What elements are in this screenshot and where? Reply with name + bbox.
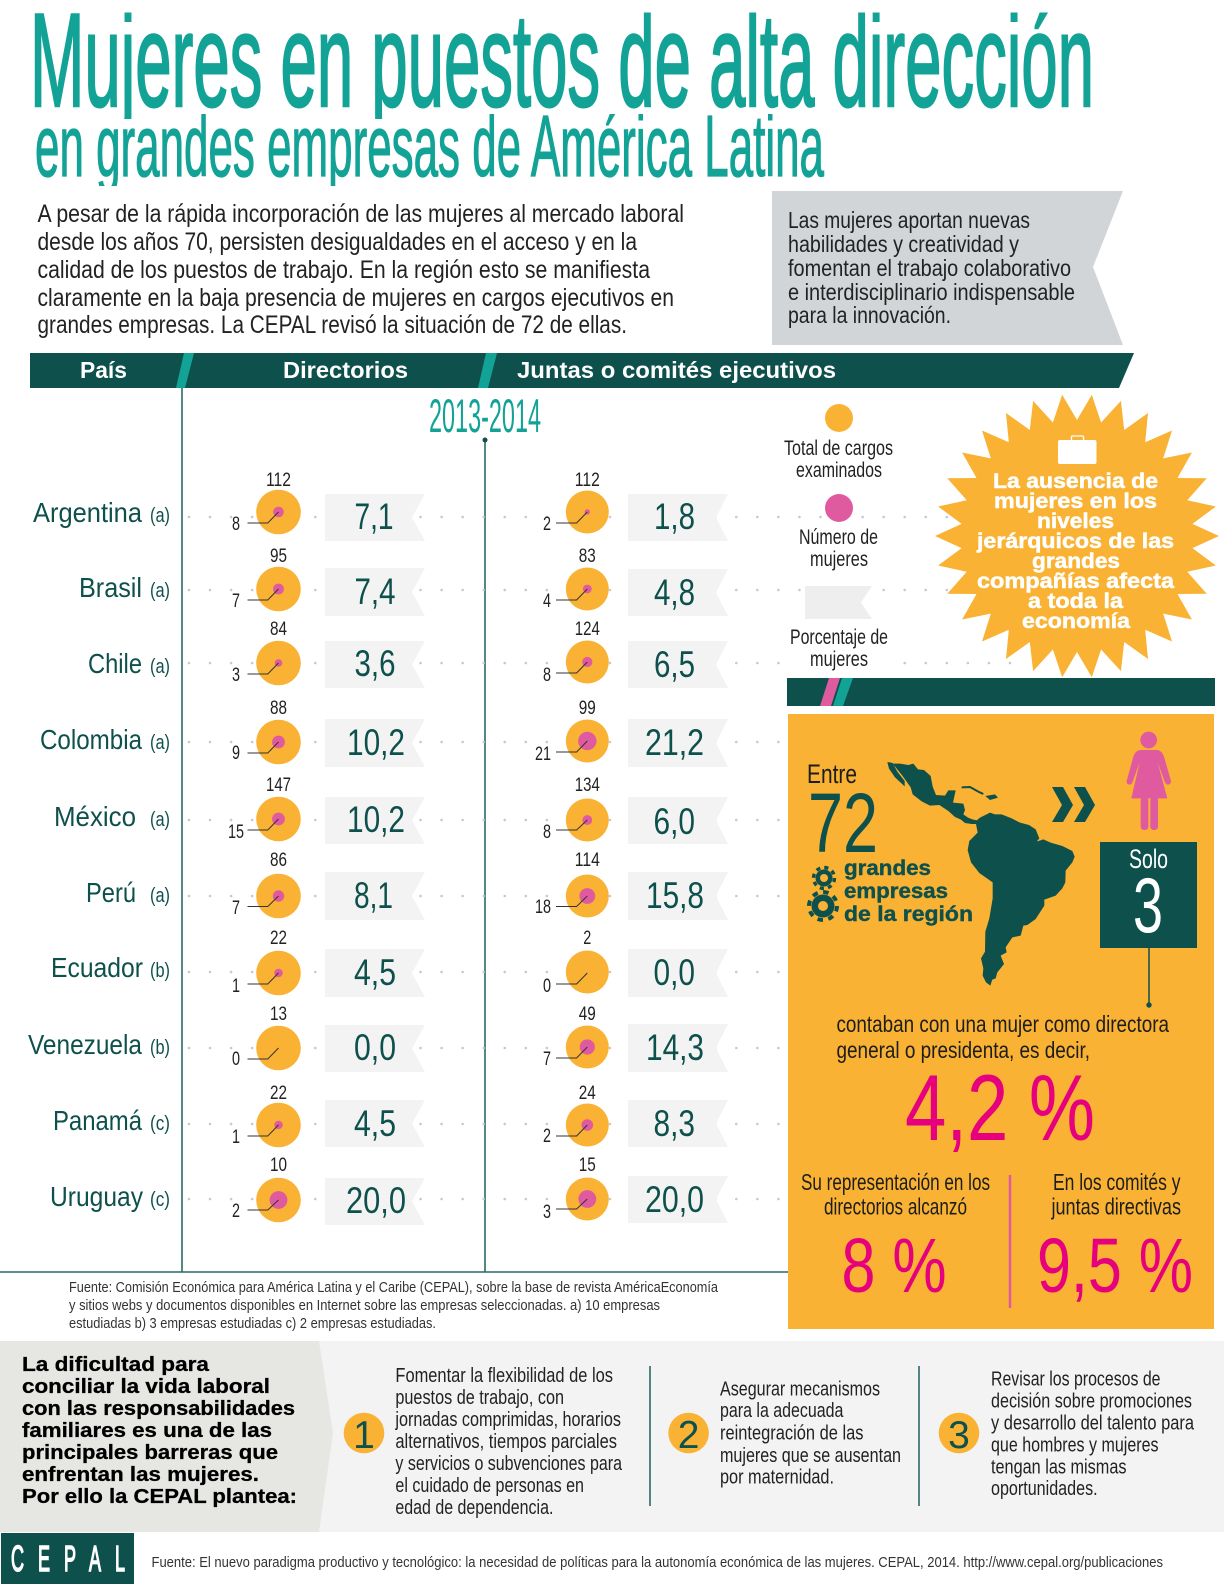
callout: innovation ribbon: fomentan el trabajo colaborativo [788,255,1071,281]
icon: double chevron arrow [1052,787,1095,822]
row: Panamá: 2 [543,1126,551,1147]
stat block: directorios 8 %: Su representación en los [801,1169,990,1195]
row: México: México [54,801,136,832]
starburst callout: compañías afecta [977,570,1174,593]
legend: Número de [799,526,878,549]
row: Ecuador: 22 [270,928,287,949]
row: Colombia: (a) [150,732,170,754]
row: Venezuela: 13 [270,1004,287,1025]
recommendation 3: Revisar los procesos de [991,1368,1160,1390]
row: Panamá: Panamá [53,1105,142,1136]
text: contaban con una mujer [836,1011,1169,1063]
row: México: 147 [266,775,291,796]
row: Perú: 15,8 [646,875,704,916]
callout: innovation ribbon: habilidades y creatividad y [788,231,1019,257]
intro text block: desde los años 70, persisten desigualdades en el acceso y en la [38,228,637,256]
row: México: (a) [150,809,170,831]
title [34,12,1090,186]
row: México: 134 [575,775,600,796]
row: Argentina: 8 [232,514,240,535]
stat block: comités 9,5 % [1037,1169,1193,1309]
row: Venezuela: 0,0 [354,1027,396,1068]
legend: Porcentaje de [790,626,888,649]
row: Brasil: Brasil [79,572,142,603]
row: Brasil: 83 [579,546,596,567]
row: Perú [86,850,728,920]
stat block: directorios 8 %: 8 % [842,1223,946,1309]
recommendation 3 [939,1368,1195,1500]
recommendation 1 [344,1365,623,1519]
row: Chile [88,619,728,688]
dark band with slashes [787,678,1215,706]
text: grandes empresas de la región: empresas [844,880,948,903]
starburst callout [935,395,1219,677]
text: contaban con una mujer: general o presidenta, es decir, [836,1037,1090,1063]
legend: mujeres [810,548,868,571]
row: Brasil: 4,8 [654,572,695,613]
panel: orange statistics [788,714,1214,1329]
intro text block: grandes empresas. La CEPAL revisó la situación de 72 de ellas. [38,311,627,339]
recommendation 2: mujeres que se ausentan [720,1445,901,1467]
panel: barrier statement: conciliar la vida laboral [22,1375,270,1398]
row: Venezuela: 14,3 [646,1027,704,1068]
row: Uruguay: 20,0 [645,1179,704,1220]
starburst callout: mujeres en los [994,490,1157,513]
recommendation 1: Fomentar la flexibilidad de los [395,1365,613,1387]
callout: innovation ribbon: Las mujeres aportan nuevas [788,207,1030,233]
recommendation 2: para la adecuada [720,1400,844,1422]
row: Venezuela: Venezuela [28,1029,142,1060]
icon: woman [1127,732,1171,830]
row: Chile: 3 [232,665,240,686]
recommendation 1: jornadas comprimidas, horarios [395,1409,621,1431]
text: grandes empresas de la región: grandes [844,857,931,880]
row: Ecuador: 4,5 [354,952,396,993]
row: Ecuador: 1 [232,976,240,997]
row: Perú: 18 [535,897,551,918]
row: Brasil [79,546,728,616]
row: Panamá [53,1083,728,1148]
recommendation 2: reintegración de las [720,1422,864,1444]
row: Argentina: (a) [150,505,170,527]
recommendation 2: 2 [678,1414,699,1457]
starburst callout: a toda la [1028,590,1123,613]
row: Brasil: 4 [543,591,551,612]
row: Panamá: 4,5 [354,1103,396,1144]
row: Argentina: 112 [575,470,600,491]
callout: innovation ribbon [772,191,1123,345]
recommendation 1: el cuidado de personas en [395,1475,584,1497]
row: México: 15 [228,822,244,843]
row: Ecuador: (b) [150,960,170,982]
callout: innovation ribbon: para la innovación. [788,302,951,328]
panel: recommendations band [0,1341,1224,1532]
row: Ecuador: Ecuador [51,952,143,983]
row: México: 10,2 [347,799,405,840]
icon: gears [809,868,837,920]
row: Uruguay: Uruguay [50,1181,143,1212]
row: Brasil: 7 [232,591,240,612]
row: Panamá: 8,3 [654,1103,695,1144]
row: Uruguay: 15 [579,1155,596,1176]
row: Colombia: 99 [579,698,596,719]
row: Argentina [33,470,728,541]
row: Venezuela: 0 [232,1049,240,1070]
row: Colombia: 21 [535,744,551,765]
table header bar: Juntas o comités ejecutivos [517,357,836,383]
text: 2013-2014 [429,389,541,442]
row: México [54,775,728,844]
row: Venezuela [28,1004,728,1072]
row: Chile: 8 [543,665,551,686]
recommendation 1: edad de dependencia. [395,1497,553,1519]
row: Ecuador [51,928,728,997]
box: Solo 3: Solo [1129,844,1168,874]
source note: Fuente: Comisión Económica para América Latina y el Caribe (CEPAL), sobre la base de revista AméricaEconomía [69,1279,719,1296]
text: Entre 72: Entre [807,759,857,789]
recommendation 2 [668,1378,901,1488]
stat block: comités 9,5 %: En los comités y [1053,1169,1181,1195]
row: Uruguay: 20,0 [346,1180,406,1221]
stat: 4,2 %: 4,2 % [905,1055,1095,1160]
text: Entre 72: 72 [808,776,878,870]
row: Ecuador: 0,0 [654,952,695,993]
row: Perú: 114 [575,850,600,871]
starburst callout: economía [1022,610,1130,633]
row: Chile: 3,6 [354,643,396,684]
recommendation 2: Asegurar mecanismos [720,1378,880,1400]
text: grandes empresas de la región [844,857,973,926]
row: Chile: 84 [270,619,287,640]
row: Uruguay: 2 [232,1201,240,1222]
row: Chile: 124 [575,619,600,640]
row: Panamá: 24 [579,1083,596,1104]
row: Venezuela: 49 [579,1004,596,1025]
table header bar: País [80,357,127,383]
panel: barrier statement: familiares es una de las [22,1419,272,1442]
intro text block: calidad de los puestos de trabajo. En la región esto se manifiesta [38,256,650,284]
row: Perú: Perú [86,877,136,908]
row: Perú: (a) [150,885,170,907]
row: Colombia: 21,2 [645,722,704,763]
starburst callout: grandes [1032,550,1120,573]
row: México: 6,0 [654,801,695,842]
row: México: 8 [543,822,551,843]
row: Colombia: Colombia [40,724,142,755]
row: Argentina: 7,1 [354,496,394,537]
legend [782,404,896,672]
intro text block: claramente en la baja presencia de mujeres en cargos ejecutivos en [38,284,674,312]
panel: barrier statement: Por ello la CEPAL plantea: [22,1485,297,1508]
row: Brasil: 7,4 [354,571,396,612]
map: Latin America [887,762,1075,986]
starburst callout: La ausencia de [993,470,1158,493]
row: Brasil: 95 [270,546,287,567]
row: Uruguay: 10 [270,1155,287,1176]
row: Ecuador: 2 [583,928,591,949]
row: Uruguay: 3 [543,1202,551,1223]
row: Argentina: Argentina [33,497,142,528]
legend: Total de cargos [784,437,893,460]
intro text block [38,200,684,339]
panel: barrier statement: con las responsabilidades [22,1397,295,1420]
logo: CEPAL [1,1533,134,1584]
table header bar [30,353,1134,388]
icon: briefcase [1058,436,1096,464]
source note: estudiadas b) 3 empresas estudiadas c) 2 empresas estudiadas. [69,1315,436,1332]
callout: innovation ribbon: e interdisciplinario indispensable [788,279,1075,305]
logo: CEPAL: CEPAL [11,1539,125,1580]
starburst callout: jerárquicos de las [976,530,1174,553]
row: Perú: 7 [232,898,240,919]
row: Brasil: (a) [150,580,170,602]
row: Venezuela: 7 [543,1049,551,1070]
row: Venezuela: (b) [150,1037,170,1059]
row: Colombia: 9 [232,743,240,764]
row: Colombia: 10,2 [347,722,405,763]
row: Perú: 86 [270,850,287,871]
stat block: directorios 8 %: directorios alcanzó [824,1194,967,1220]
recommendation 1: puestos de trabajo, con [395,1387,564,1409]
row: Panamá: (c) [150,1113,170,1135]
row: Colombia [40,698,728,767]
row: Chile: 6,5 [654,644,695,685]
box: Solo 3: 3 [1133,861,1163,949]
row: Argentina: 112 [266,470,291,491]
recommendation 2: por maternidad. [720,1466,834,1488]
row: Uruguay [50,1155,728,1225]
recommendation 1: y servicios o subvenciones para [395,1453,623,1475]
row: Argentina: 2 [543,514,551,535]
recommendation 1: 1 [353,1414,375,1457]
panel: barrier statement: enfrentan las mujeres. [22,1463,259,1486]
stat block: comités 9,5 %: juntas directivas [1051,1194,1181,1220]
row: Perú: 8,1 [354,875,393,916]
panel: barrier statement [0,1341,333,1532]
row: Ecuador: 0 [543,976,551,997]
recommendation 3: tengan las mismas [991,1456,1126,1478]
panel: barrier statement: principales barreras que [22,1441,278,1464]
row: Colombia: 88 [270,698,287,719]
legend: examinados [796,459,882,482]
row: Panamá: 22 [270,1083,287,1104]
source note [69,1279,719,1332]
recommendation 3: que hombres y mujeres [991,1434,1158,1456]
row: Uruguay: (c) [150,1189,170,1211]
text: Entre 72 [807,759,878,870]
row: Chile: Chile [88,648,142,679]
intro text block: A pesar de la rápida incorporación de las mujeres al mercado laboral [38,200,684,228]
box: Solo 3 [1100,842,1197,949]
recommendation 3: 3 [948,1414,970,1457]
table header bar: Directorios [283,357,408,383]
row: Chile: (a) [150,656,170,678]
recommendation 1: alternativos, tiempos parciales [395,1431,617,1453]
recommendation 3: oportunidades. [991,1478,1098,1500]
row: Argentina: 1,8 [654,496,695,537]
stat block: directorios 8 % [801,1169,990,1309]
source note: y sitios webs y documentos disponibles en Internet sobre las empresas seleccionadas. a) 10 empresas [69,1297,660,1314]
starburst callout: niveles [1037,510,1114,533]
panel: barrier statement: La dificultad para [22,1353,210,1376]
row: Panamá: 1 [232,1127,240,1148]
legend: mujeres [810,648,868,671]
text: grandes empresas de la región: de la región [844,903,973,926]
